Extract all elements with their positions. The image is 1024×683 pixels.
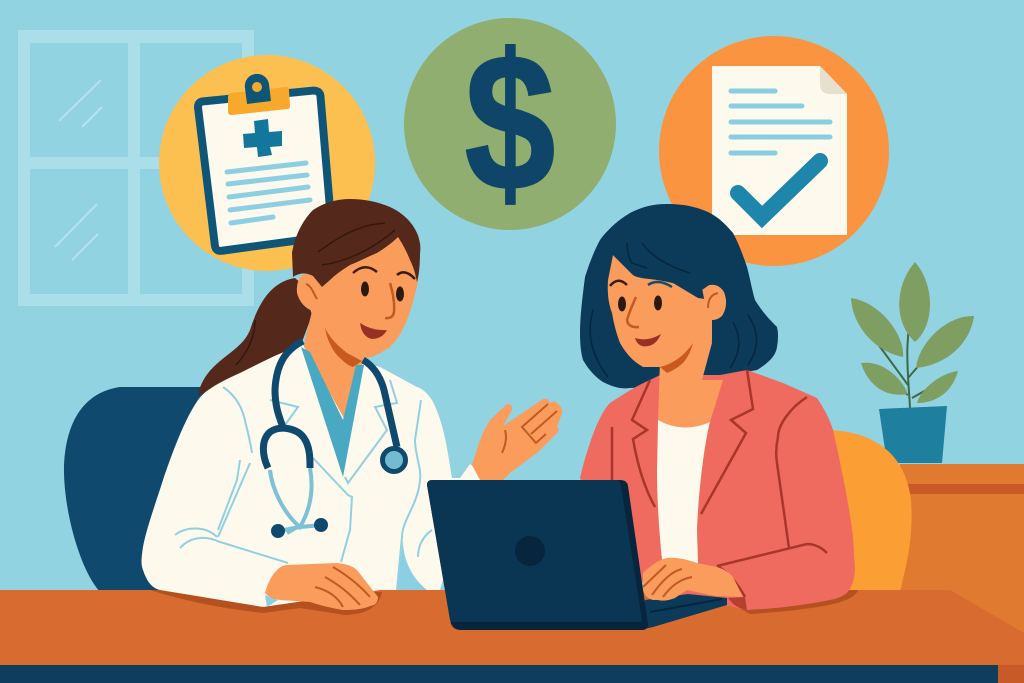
patient face: [608, 255, 712, 367]
chin shadow: [325, 328, 362, 367]
patient ear: [702, 285, 726, 320]
patient hair lines: [590, 243, 756, 377]
blazer lines: [612, 370, 827, 597]
plant: [851, 262, 974, 463]
patient hand on keyboard: [643, 558, 743, 601]
chair: patient orange: [830, 430, 912, 592]
chair: doctor navy: [64, 387, 205, 592]
patient blazer: [580, 370, 855, 610]
table: [0, 590, 1024, 683]
doctor cuff: [452, 464, 490, 482]
patient face features: [610, 281, 672, 346]
doctor coat: [142, 345, 470, 607]
scrubs: [301, 347, 364, 477]
patient: [580, 204, 855, 610]
doctor neck: [303, 307, 364, 420]
icon: green circle with dollar sign: $: [465, 14, 555, 231]
doctor hair: [292, 199, 420, 287]
patient neck: [658, 317, 723, 428]
icon: green circle with dollar sign: [404, 14, 616, 231]
window: [18, 30, 254, 306]
patient hair back: [580, 204, 778, 388]
patient jaw shadow: [660, 343, 693, 373]
doctor head: [300, 230, 418, 358]
patient fringe: [612, 206, 735, 298]
stethoscope: [263, 341, 406, 538]
coat blue lining: [397, 540, 427, 590]
coat lines: [175, 380, 432, 590]
doctor ear: [297, 274, 321, 312]
blazer cuff shade: [728, 597, 747, 610]
doctor raised hand: [472, 399, 562, 480]
patient blouse: [657, 420, 710, 563]
doctor: [142, 199, 562, 610]
sideboard: [900, 464, 1024, 634]
icon: orange circle with document and check: [659, 36, 889, 266]
laptop: [427, 480, 727, 630]
doctor face features: [353, 267, 415, 339]
icon: yellow circle with clipboard: [159, 55, 375, 271]
doctor ponytail: [198, 278, 312, 395]
doctor hand on table: [265, 563, 378, 610]
